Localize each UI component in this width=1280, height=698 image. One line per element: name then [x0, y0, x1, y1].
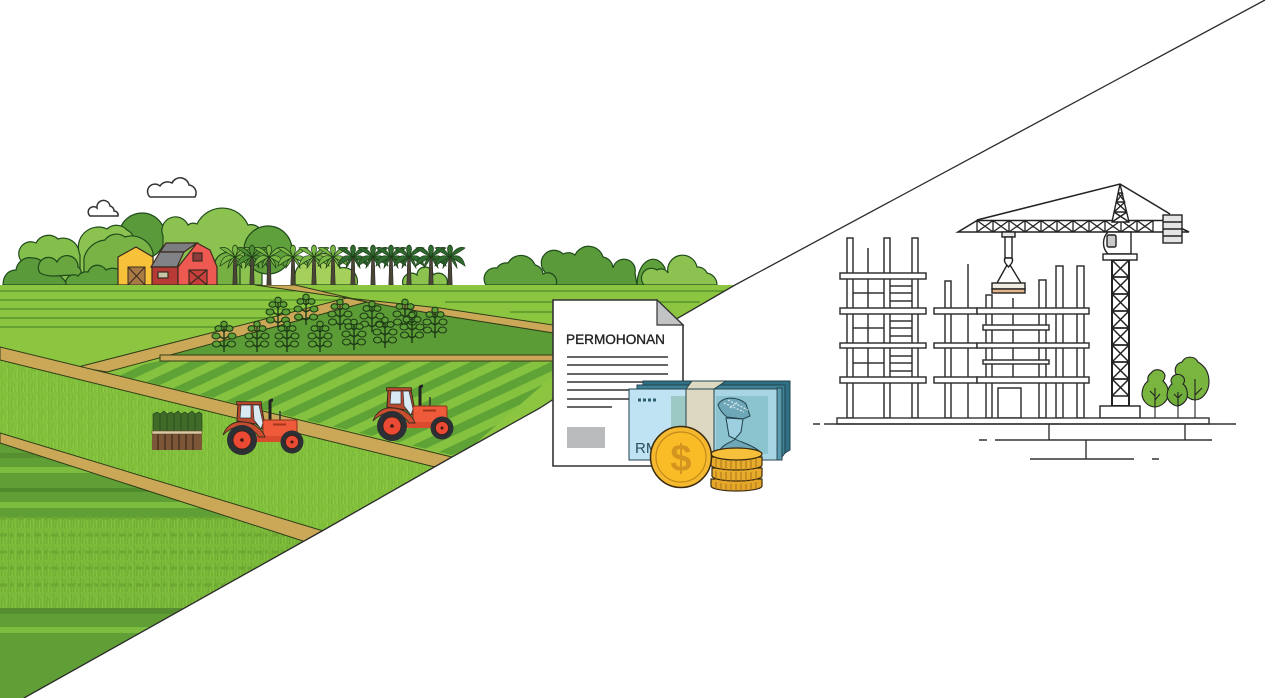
document text lines: [567, 357, 668, 407]
seedling crate: [152, 411, 202, 450]
treeline behind farm: [3, 208, 447, 285]
clouds: [88, 178, 196, 216]
base field: [0, 285, 734, 547]
farmland: [0, 285, 740, 698]
tower crane: [958, 184, 1189, 418]
tractor 2: [373, 386, 454, 441]
ground slab and lines: [813, 418, 1236, 459]
soybean plants: [212, 294, 447, 352]
gold coin: $: [670, 438, 692, 480]
columns: [847, 238, 853, 418]
bushes right: [484, 246, 717, 285]
middle grass field: [0, 360, 435, 541]
red barn: [151, 243, 217, 285]
field furrow lines: [0, 291, 740, 327]
dark soybean field: [160, 302, 560, 355]
small trees: [1142, 357, 1209, 418]
tractor 1: [223, 400, 304, 455]
cables: [977, 184, 1170, 220]
gold coin: [650, 426, 712, 488]
palm row: [220, 245, 465, 285]
RM label: RM: [635, 440, 658, 457]
hook and load: [992, 232, 1025, 293]
tower peak: [1112, 184, 1129, 222]
unfinished building left: [840, 238, 926, 418]
dirt roads: [0, 285, 560, 543]
document title: PERMOHONAN: [566, 331, 665, 347]
note dots: [638, 398, 657, 402]
banknote bundle: [629, 381, 790, 460]
doorway: [998, 388, 1021, 418]
crane cab: [1103, 232, 1137, 260]
yellow shed: [118, 247, 153, 285]
signature box: [567, 427, 605, 448]
jib: [958, 220, 1189, 232]
stairs and rails: [853, 286, 912, 371]
lower field: [0, 440, 320, 698]
unfinished building right: [934, 264, 1089, 418]
coin stack: [711, 448, 762, 491]
portrait: [718, 398, 758, 450]
counterweight: [1163, 215, 1182, 243]
floor slabs: [840, 273, 926, 279]
striped field: [105, 361, 570, 457]
mast: [1112, 260, 1129, 406]
application document: [553, 300, 683, 466]
crane base: [1100, 406, 1140, 418]
